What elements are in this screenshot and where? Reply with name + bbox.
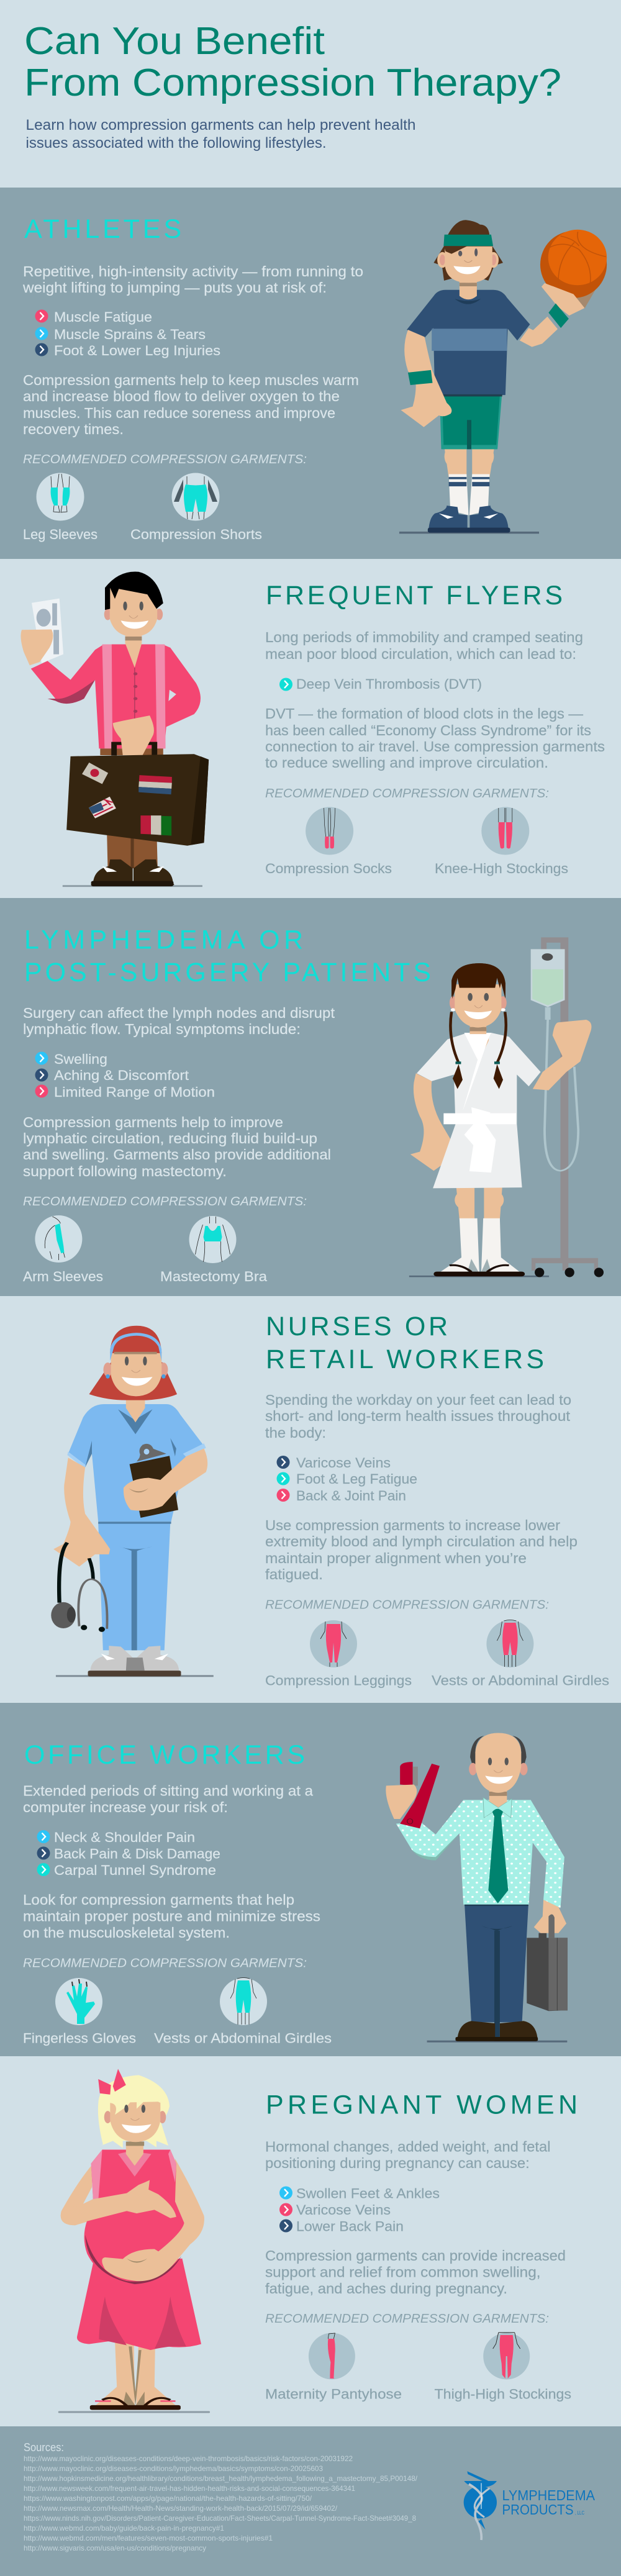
heading: lymphedema or post-surgery patients: POST-SURGERY PATIENTS <box>24 958 431 987</box>
label: leg sleeves: Leg Sleeves <box>23 527 97 542</box>
list: nurse risks <box>277 1455 417 1503</box>
text: office intro: computer increase your risk of: <box>23 1799 228 1815</box>
label: arm sleeves: Arm Sleeves <box>23 1269 103 1284</box>
text: athletes intro <box>22 263 363 296</box>
text: lymphedema explanation: and swelling. Garments also provide additional <box>23 1146 331 1163</box>
label: maternity pantyhose: Maternity Pantyhose <box>265 2386 402 2402</box>
icon: vests or abdominal girdles <box>220 1977 267 2025</box>
text: nurses explanation <box>265 1517 578 1582</box>
panel: athletes <box>0 188 621 559</box>
panel: page header <box>0 0 621 188</box>
list: pregnancy symptoms: Varicose Veins <box>296 2202 391 2218</box>
icon: fingerless gloves <box>55 1978 102 2025</box>
text: office explanation: maintain proper posture and minimize stress <box>23 1908 320 1924</box>
text: nurses intro: short- and long-term health issues throughout <box>265 1408 571 1424</box>
text: athletes intro: weight lifting to jumping — puts you at risk of: <box>22 279 327 296</box>
list: lymphedema symptoms: Aching & Discomfort <box>54 1068 189 1083</box>
heading: nurses or retail workers: NURSES OR <box>266 1312 448 1341</box>
icon: mastectomy bra <box>189 1216 236 1263</box>
icon: knee-high stockings <box>481 807 529 855</box>
illustration: patient with IV stand <box>409 937 604 1277</box>
text: pregnancy explanation: fatigue, and aches during pregnancy. <box>265 2280 507 2297</box>
text: athletes explanation: muscles. This can reduce soreness and improve <box>23 405 335 421</box>
heading: athletes: ATHLETES <box>24 214 181 244</box>
text: lymphedema explanation <box>23 1114 331 1179</box>
illustration: athlete with basketball <box>399 220 607 533</box>
intro text: issues associated with the following lifestyles. <box>26 135 327 152</box>
source links <box>24 2454 418 2552</box>
subheading: recommended garments: RECOMMENDED COMPRESSION GARMENTS: <box>23 1956 307 1970</box>
panel: frequent flyers <box>0 559 621 898</box>
text: lymphedema intro: Surgery can affect the lymph nodes and disrupt <box>23 1005 335 1021</box>
text: nurses explanation: maintain proper alignment when you’re <box>265 1550 527 1566</box>
intro text <box>26 117 416 152</box>
list: office risks: Back Pain & Disk Damage <box>54 1846 220 1862</box>
text: lymphedema intro <box>23 1005 335 1037</box>
illustration: nurse with stethoscope <box>51 1326 214 1677</box>
list: nurse risks: Foot & Leg Fatigue <box>296 1471 417 1487</box>
text: office intro: Extended periods of sitting and working at a <box>23 1782 313 1798</box>
label: fingerless gloves: Fingerless Gloves <box>23 2031 136 2046</box>
icon: arm sleeves <box>35 1215 82 1263</box>
label: compression shorts: Compression Shorts <box>130 527 262 542</box>
list: lymphedema symptoms: Swelling <box>54 1051 107 1067</box>
list: pregnancy symptoms <box>279 2186 440 2234</box>
text: lymphedema explanation: support following mastectomy. <box>23 1163 227 1179</box>
list: pregnancy symptoms: Swollen Feet & Ankles <box>296 2186 440 2201</box>
heading: lymphedema or post-surgery patients <box>24 925 431 987</box>
title <box>24 20 561 104</box>
list: pregnancy symptoms: Lower Back Pain <box>296 2218 404 2234</box>
text: flyers explanation: to reduce swelling and improve circulation. <box>265 755 548 771</box>
text: athletes intro: Repetitive, high-intensity activity — from running to <box>23 263 363 279</box>
list: athlete risks: Muscle Fatigue <box>54 309 152 325</box>
source links: http://www.mayoclinic.org/diseases-conditions/lymphedema/basics/symptoms/con-20025603 <box>24 2464 323 2473</box>
text: athletes explanation: Compression garments help to keep muscles warm <box>23 372 359 388</box>
list: office risks: Neck & Shoulder Pain <box>54 1830 195 1845</box>
list: athlete risks: Muscle Sprains & Tears <box>54 327 206 342</box>
list: athlete risks: Foot & Lower Leg Injuries <box>54 343 220 358</box>
text: nurses explanation: fatigued. <box>265 1566 323 1582</box>
text: athletes explanation <box>23 372 359 437</box>
list: athlete risks <box>35 309 220 358</box>
logo: lymphedema products <box>464 2471 596 2540</box>
heading: pregnant women: PREGNANT WOMEN <box>266 2090 578 2120</box>
title: From Compression Therapy? <box>24 61 561 104</box>
heading: sources: Sources: <box>24 2441 64 2454</box>
text: flyers intro: mean poor blood circulation, which can lead to: <box>265 646 576 662</box>
text: pregnancy explanation <box>265 2247 566 2297</box>
panel: lymphedema <box>0 898 621 1296</box>
text: nurses explanation: Use compression garments to increase lower <box>265 1517 560 1533</box>
heading: frequent flyers: FREQUENT FLYERS <box>266 581 563 610</box>
list: nurse risks: Back & Joint Pain <box>296 1488 406 1503</box>
logo: lymphedema products: LYMPHEDEMA <box>502 2487 596 2503</box>
text: office explanation: Look for compression garments that help <box>23 1892 294 1908</box>
text: lymphedema intro: lymphatic flow. Typical symptoms include: <box>23 1021 301 1037</box>
logo: lymphedema products: , LLC <box>575 2510 584 2516</box>
source links: http://www.hopkinsmedicine.org/healthlibrary/conditions/breast_health/lymphedema_following_a_mastectomy_85,P00148/ <box>24 2474 418 2483</box>
heading: lymphedema or post-surgery patients: LYMPHEDEMA OR <box>24 925 303 955</box>
icon: vests or abdominal girdles <box>486 1620 533 1667</box>
illustration: frequent flyer with suitcase <box>20 571 209 887</box>
text: nurses intro: the body: <box>265 1425 326 1441</box>
text: flyers explanation: has been called “Economy Class Syndrome” for its <box>265 722 591 738</box>
list: lymphedema symptoms: Limited Range of Motion <box>54 1084 215 1100</box>
source links: http://www.newsmax.com/Health/Health-News/standing-work-health-back/2015/07/29/id/659402/ <box>24 2504 338 2513</box>
label: thigh-high stockings: Thigh-High Stockings <box>435 2386 571 2402</box>
list: nurse risks: Varicose Veins <box>296 1455 391 1471</box>
source links: http://www.webmd.com/baby/guide/back-pain-in-pregnancy#1 <box>24 2524 224 2533</box>
text: flyers intro <box>265 629 583 662</box>
source links: http://www.newsweek.com/frequent-air-travel-has-hidden-health-risks-and-social-consequences-364341 <box>24 2484 355 2493</box>
text: athletes explanation: recovery times. <box>23 421 124 437</box>
icon: thigh-high stockings <box>483 2333 530 2380</box>
text: lymphedema explanation: Compression garments help to improve <box>23 1114 283 1130</box>
heading: office workers: OFFICE WORKERS <box>24 1740 305 1770</box>
text: flyers intro: Long periods of immobility and cramped seating <box>265 629 583 645</box>
text: pregnant intro <box>265 2139 550 2171</box>
text: pregnant intro: positioning during pregnancy can cause: <box>265 2155 530 2171</box>
text: pregnant intro: Hormonal changes, added weight, and fetal <box>265 2139 550 2155</box>
label: mastectomy bra: Mastectomy Bra <box>160 1269 268 1284</box>
list: office risks: Carpal Tunnel Syndrome <box>54 1862 216 1878</box>
icon: compression socks <box>306 807 353 855</box>
list: flyer risks: Deep Vein Thrombosis (DVT) <box>296 676 482 692</box>
icon: compression leggings <box>310 1620 357 1667</box>
heading: nurses or retail workers <box>266 1312 544 1374</box>
text: office explanation: on the musculoskeletal system. <box>23 1925 230 1941</box>
list: office risks <box>37 1830 220 1878</box>
list: lymphedema symptoms <box>35 1051 215 1100</box>
text: flyers explanation <box>265 705 605 771</box>
label: knee-high stockings: Knee-High Stockings <box>435 861 568 876</box>
label: vests or abdominal girdles: Vests or Abdominal Girdles <box>432 1673 609 1688</box>
subheading: recommended garments: RECOMMENDED COMPRESSION GARMENTS: <box>265 2311 549 2326</box>
source links: http://www.sigvaris.com/usa/en-us/conditions/pregnancy <box>24 2544 206 2552</box>
subheading: recommended garments: RECOMMENDED COMPRESSION GARMENTS: <box>23 452 307 466</box>
panel: nurses or retail workers <box>0 1296 621 1703</box>
text: office intro <box>23 1782 313 1815</box>
subheading: recommended garments: RECOMMENDED COMPRESSION GARMENTS: <box>265 1597 549 1612</box>
text: nurses intro: Spending the workday on your feet can lead to <box>265 1392 571 1408</box>
logo: lymphedema products: PRODUCTS <box>502 2501 574 2518</box>
panel: office workers <box>0 1703 621 2056</box>
icon: maternity pantyhose <box>309 2333 355 2380</box>
source links: http://www.webmd.com/men/features/seven-most-common-sports-injuries#1 <box>24 2534 273 2542</box>
text: nurses intro <box>265 1392 571 1441</box>
text: pregnancy explanation: support and relief from common swelling, <box>265 2264 540 2280</box>
title: Can You Benefit <box>24 20 325 63</box>
label: vests or abdominal girdles: Vests or Abdominal Girdles <box>154 2031 332 2046</box>
illustration: office worker with phone <box>386 1733 568 2043</box>
text: athletes explanation: and increase blood flow to deliver oxygen to the <box>23 388 340 404</box>
heading: nurses or retail workers: RETAIL WORKERS <box>266 1345 544 1374</box>
label: compression leggings: Compression Leggings <box>265 1673 412 1688</box>
panel: sources footer <box>0 2426 621 2576</box>
text: flyers explanation: connection to air travel. Use compression garments <box>265 738 605 755</box>
icon: leg sleeves <box>36 473 84 520</box>
subheading: recommended garments: RECOMMENDED COMPRESSION GARMENTS: <box>23 1194 307 1209</box>
intro text: Learn how compression garments can help prevent health <box>26 117 416 134</box>
text: nurses explanation: extremity blood and lymph circulation and help <box>265 1533 578 1549</box>
subheading: recommended garments: RECOMMENDED COMPRESSION GARMENTS: <box>265 786 549 800</box>
text: office explanation <box>23 1892 320 1941</box>
source links: https://www.ninds.nih.gov/Disorders/Patient-Caregiver-Education/Fact-Sheets/Carpal-Tunnel-Syndrome-Fact-Sheet#3049_8 <box>24 2514 416 2523</box>
illustration: pregnant woman <box>58 2069 210 2413</box>
text: flyers explanation: DVT — the formation of blood clots in the legs — <box>265 705 583 722</box>
source links: http://www.mayoclinic.org/diseases-conditions/deep-vein-thrombosis/basics/risk-factors/con-20031922 <box>24 2454 353 2463</box>
icon: compression shorts <box>171 473 220 520</box>
text: lymphedema explanation: lymphatic circulation, reducing fluid build-up <box>23 1130 317 1146</box>
label: compression socks: Compression Socks <box>265 861 392 876</box>
panel: pregnant women <box>0 2056 621 2426</box>
source links: https://www.washingtonpost.com/apps/g/page/national/the-health-hazards-of-sitting/750/ <box>24 2494 312 2503</box>
text: pregnancy explanation: Compression garments can provide increased <box>265 2247 566 2264</box>
